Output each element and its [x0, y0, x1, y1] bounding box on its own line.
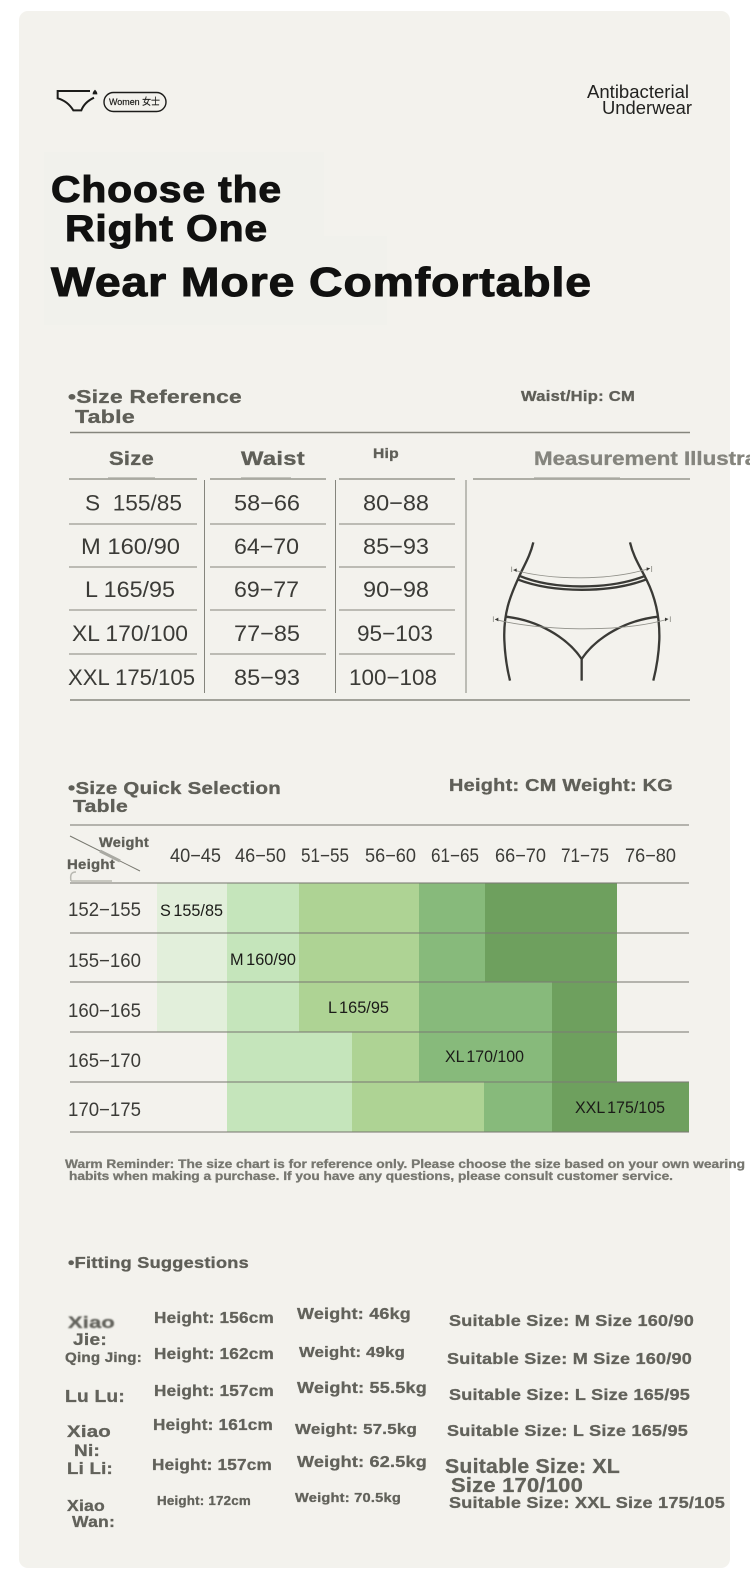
heading: size quick selection table: Table	[73, 796, 128, 816]
weights: Weight: 55.5kg	[297, 1380, 427, 1397]
size reference table	[68, 432, 750, 700]
suitable sizes: Size 170/100	[451, 1475, 583, 1497]
heights: Height: 161cm	[153, 1417, 273, 1434]
weight column labels: 71−75	[561, 845, 609, 867]
waist column: 85−93	[234, 665, 300, 690]
corner header: Weight	[99, 835, 149, 850]
size band labels: L 165/95	[328, 999, 389, 1017]
heading: size reference table: •Size Reference	[68, 386, 242, 407]
header product name: Antibacterial	[587, 82, 689, 102]
weight column labels	[170, 845, 676, 867]
hip column: 90−98	[363, 577, 429, 602]
header product name: Underwear	[602, 98, 692, 118]
names	[65, 1314, 142, 1531]
hip column: 100−108	[349, 665, 437, 690]
table column headers: Waist	[241, 448, 305, 470]
size quick selection chart	[67, 825, 689, 1132]
size column: L 165/95	[85, 577, 175, 602]
waist column: 69−77	[234, 577, 299, 602]
heading: fitting suggestions: •Fitting Suggestions	[68, 1255, 249, 1272]
fitting suggestions list	[65, 1306, 725, 1531]
corner header	[67, 835, 149, 881]
heights	[152, 1310, 274, 1508]
size column: M 160/90	[81, 534, 180, 559]
heading: size quick selection table	[68, 778, 281, 816]
hip column	[349, 490, 437, 690]
height row labels: 155−160	[68, 950, 141, 972]
badge: women: Women 女士	[109, 96, 160, 108]
weights: Weight: 57.5kg	[295, 1422, 417, 1438]
heights: Height: 162cm	[154, 1346, 274, 1363]
table column headers: Size	[109, 448, 154, 470]
height row labels: 152−155	[68, 899, 141, 921]
weights: Weight: 49kg	[299, 1344, 405, 1361]
measurement illustration	[493, 542, 670, 681]
size column: S 155/85	[85, 490, 182, 516]
height row labels: 170−175	[68, 1099, 141, 1121]
suitable sizes: Suitable Size: XL	[445, 1456, 620, 1478]
weights	[295, 1306, 427, 1505]
size band labels: XL 170/100	[445, 1048, 524, 1066]
warm reminder: Warm Reminder: The size chart is for reference only. Please choose the size based on your own wearing	[65, 1157, 745, 1171]
waist column: 77−85	[234, 621, 300, 646]
names: Jie:	[73, 1331, 107, 1349]
weight column labels: 40−45	[170, 845, 221, 867]
size band labels: S 155/85	[160, 902, 223, 920]
heights: Height: 157cm	[152, 1457, 272, 1474]
chart colour bands	[157, 883, 689, 1132]
names: Xiao	[67, 1498, 105, 1515]
height row labels: 160−165	[68, 1000, 141, 1022]
names: Lu Lu:	[65, 1386, 125, 1406]
names: Xiao	[68, 1314, 115, 1332]
size band labels: XXL 175/105	[575, 1099, 665, 1117]
weight column labels: 46−50	[235, 845, 286, 867]
title: Right One	[65, 208, 268, 249]
header product name	[587, 82, 692, 118]
weight column labels: 61−65	[431, 845, 479, 867]
unit note: waist and hip: Waist/Hip: CM	[521, 389, 635, 405]
hip column: 80−88	[363, 490, 429, 516]
heading: size reference table	[68, 386, 242, 427]
weights: Weight: 46kg	[297, 1306, 411, 1323]
header logo with women badge	[58, 90, 166, 112]
waist column	[234, 490, 300, 690]
title: Wear More Comfortable	[51, 259, 592, 305]
weight column labels: 76−80	[625, 845, 676, 867]
weight column labels: 56−60	[365, 845, 416, 867]
heading: size quick selection table: •Size Quick Selection	[68, 778, 281, 798]
table column headers	[109, 446, 750, 470]
corner header: Height	[67, 857, 115, 872]
size band labels: M 160/90	[230, 951, 296, 969]
weights: Weight: 70.5kg	[295, 1490, 401, 1505]
names: Li Li:	[67, 1459, 113, 1478]
weight column labels: 66−70	[495, 845, 546, 867]
heights: Height: 157cm	[154, 1383, 274, 1400]
names: Qing Jing:	[65, 1350, 142, 1365]
suitable sizes: Suitable Size: L Size 165/95	[447, 1423, 688, 1440]
size column: XXL 175/105	[68, 665, 195, 690]
waist column: 64−70	[234, 534, 299, 559]
weights: Weight: 62.5kg	[297, 1454, 427, 1471]
warm reminder: habits when making a purchase. If you have any questions, please consult customer service.	[69, 1169, 673, 1183]
size band labels	[160, 902, 665, 1117]
suitable sizes: Suitable Size: M Size 160/90	[449, 1313, 694, 1330]
weight column labels: 51−55	[301, 845, 349, 867]
heading: size reference table: Table	[75, 406, 135, 427]
names: Ni:	[74, 1441, 100, 1460]
title	[51, 169, 592, 305]
height row labels	[68, 899, 141, 1121]
suitable sizes: Suitable Size: XXL Size 175/105	[449, 1495, 725, 1512]
suitable sizes: Suitable Size: M Size 160/90	[447, 1351, 692, 1368]
unit note: height and weight: Height: CM Weight: KG	[449, 775, 673, 795]
suitable sizes: Suitable Size: L Size 165/95	[449, 1387, 690, 1404]
suitable sizes	[445, 1313, 725, 1512]
hip column: 95−103	[357, 621, 433, 646]
icon: underwear	[58, 90, 97, 110]
heights: Height: 172cm	[157, 1494, 251, 1508]
size column: XL 170/100	[72, 621, 188, 646]
warm reminder	[65, 1157, 745, 1183]
waist column: 58−66	[234, 490, 300, 516]
names: Wan:	[72, 1514, 115, 1531]
height row labels: 165−170	[68, 1050, 141, 1072]
table column headers: Hip	[373, 446, 399, 461]
title: Choose the	[51, 169, 282, 210]
hip column: 85−93	[363, 534, 429, 559]
size column	[68, 490, 195, 690]
title backdrop patch	[44, 152, 387, 325]
names: Xiao	[67, 1422, 111, 1441]
heights: Height: 156cm	[154, 1310, 274, 1327]
